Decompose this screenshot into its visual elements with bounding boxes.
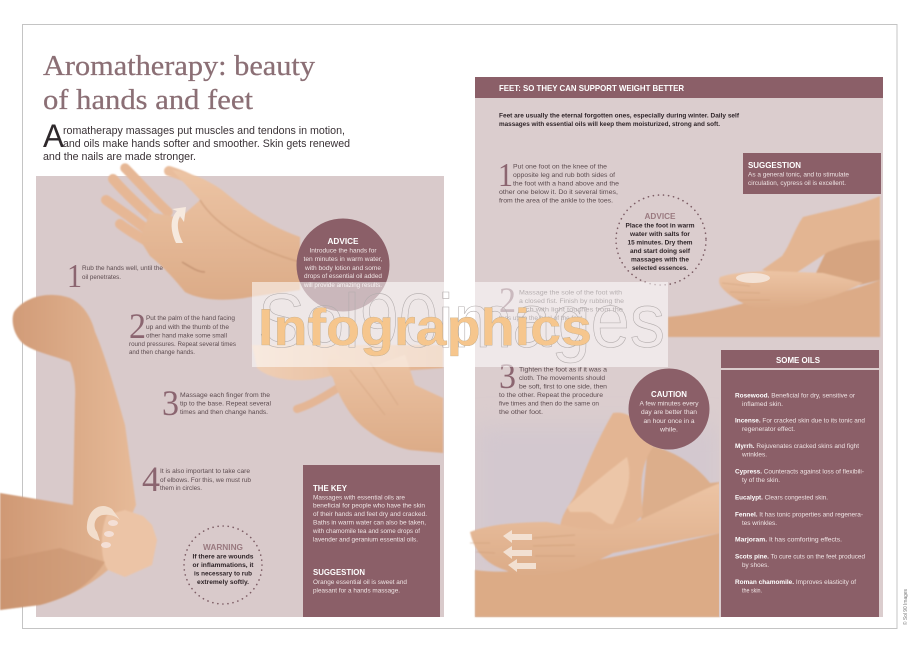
callout: advice circle: ten minutes in warm water, — [304, 256, 383, 263]
panel: the key and suggestion: Massages with essential oils are — [313, 494, 405, 502]
callout: foot advice: 15 minutes. Dry them — [628, 240, 693, 246]
callout: advice circle: ADVICE — [328, 236, 359, 246]
callout: foot advice: water with salts for — [629, 231, 690, 238]
panel: the key and suggestion: THE KEY — [313, 483, 347, 493]
photo: leg and foot massage — [470, 413, 720, 617]
foot step 3: cloth. The movements should — [519, 375, 605, 382]
panel: some oils list: Scots pine. To cure cuts on the feet produced — [735, 554, 865, 560]
icon: curved arrow — [172, 207, 186, 243]
suggestion box — [743, 153, 881, 194]
callout: advice circle — [296, 218, 390, 312]
callout: foot advice: Place the foot in warm — [626, 222, 695, 230]
callout: advice circle: Introduce the hands for — [310, 248, 377, 254]
panel: some oils list: regenerator effect. — [742, 426, 795, 433]
icon: foot highlight — [736, 273, 770, 283]
foot step 1 — [498, 157, 619, 204]
callout: warning — [184, 526, 262, 604]
callout: caution: an hour once in a — [644, 418, 695, 425]
callout: advice circle: with body lotion and some — [304, 265, 381, 272]
step 4: them in circles. — [160, 485, 202, 492]
callout: caution: CAUTION — [651, 389, 687, 399]
panel: some oils list: the skin. — [742, 588, 762, 594]
foot step 2: 2 — [499, 280, 516, 320]
watermark: Sol90images — [258, 279, 665, 364]
intro text — [43, 118, 350, 163]
icon: elbow circular arrow — [87, 506, 120, 541]
panel: the key and suggestion: beneficial for people who have the skin — [313, 502, 425, 510]
panel: the key and suggestion: lavender and geranium essential oils. — [313, 536, 418, 544]
panel: the key and suggestion: Orange essential oil is sweet and — [313, 579, 407, 586]
panel: the key and suggestion: of their hands and feet dry and cracked. — [313, 511, 427, 518]
foot step 2: arch with light touches from the — [519, 306, 623, 314]
title: Aromatherapy: beauty — [43, 50, 316, 82]
step 4: It is also important to take care — [160, 468, 250, 475]
step 1 — [67, 258, 163, 295]
title: of hands and feet — [43, 84, 253, 116]
callout: advice circle: will provide amazing results. — [303, 282, 382, 289]
photo: hands on fingers — [252, 345, 443, 453]
foot step 3: to the other. Repeat the procedure — [499, 392, 603, 399]
icon: white arrows on foot — [503, 530, 536, 572]
callout: warning: WARNING — [203, 543, 243, 552]
callout: advice circle: drops of essential oil added — [304, 273, 382, 280]
suggestion box: circulation, cypress oil is excellent. — [748, 180, 846, 187]
credit: © Sol 90 Images — [902, 589, 909, 625]
foot step 2: a closed fist. Finish by rubbing the — [519, 298, 624, 305]
callout: warning: is necessary to rub — [194, 570, 252, 578]
panel: some oils list: Rosewood. Beneficial for dry, sensitive or — [735, 392, 856, 400]
panel: some oils list: inflamed skin. — [742, 401, 783, 408]
feet header bar — [475, 77, 883, 98]
foot step 1: other one below it. Do it several times, — [499, 189, 618, 196]
foot step 1: opposite leg and rub both sides of — [513, 172, 615, 179]
panel: some oils list: Marjoram. It has comforting effects. — [735, 536, 842, 544]
photo: foot on knee — [668, 196, 880, 337]
callout: caution: day are better than — [641, 409, 697, 416]
panel: the key and suggestion: SUGGESTION — [313, 567, 365, 577]
step 4 — [142, 459, 251, 499]
panel: some oils header: SOME OILS — [776, 355, 820, 365]
foot step 3: the other foot. — [499, 409, 543, 416]
panel: the key and suggestion: with chamomile tea and some drops of — [312, 528, 420, 535]
panel: some oils list: wrinkles. — [741, 452, 767, 458]
foot step 2: Massage the sole of the foot with — [519, 290, 622, 296]
step 1: oil penetrates. — [82, 274, 121, 281]
panel: the key and suggestion — [303, 465, 440, 617]
nails — [101, 520, 118, 548]
panel: some oils list: tes wrinkles. — [742, 520, 777, 527]
step 3 — [162, 383, 272, 423]
panel: some oils list: Myrrh. Rejuvenates cracked skins and fight — [735, 443, 859, 450]
foot step 2: toes up to the heel of the foot. — [499, 315, 584, 322]
intro text: A — [43, 118, 65, 154]
panel: hands — [36, 176, 444, 617]
feet intro: massages with essential oils will keep them moisturized, strong and soft. — [499, 121, 720, 128]
step 2: Put the palm of the hand facing — [146, 315, 235, 322]
callout: caution — [628, 368, 710, 450]
step 3: tip to the base. Repeat several — [180, 400, 272, 408]
panel: some oils list: Roman chamomile. Improves elasticity of — [735, 579, 856, 586]
step 1: Rub the hands well, until the — [82, 265, 163, 272]
callout: foot advice: selected essences. — [632, 265, 688, 272]
suggestion box: SUGGESTION — [748, 160, 801, 170]
panel: the key and suggestion: Baths in warm water can also be taken, — [313, 520, 426, 526]
step 4: of elbows. For this, we must rub — [160, 477, 251, 484]
panel: some oils list: ty of the skin. — [742, 477, 780, 484]
step 2: up and with the thumb of the — [146, 324, 229, 331]
callout: caution: while. — [659, 426, 678, 434]
step 2: other hand make some small — [146, 332, 228, 340]
callout: caution: A few minutes every — [640, 400, 699, 408]
intro text: and the nails are made stronger. — [43, 151, 196, 163]
step 2: and then change hands. — [129, 349, 195, 356]
intro text: and oils make hands softer and smoother. Skin gets renewed — [63, 138, 350, 150]
panel: some oils list: by shoes. — [742, 562, 769, 569]
callout: foot advice: and start doing self — [630, 248, 691, 255]
title — [43, 50, 316, 116]
callout: foot advice: ADVICE — [644, 212, 676, 221]
foot step 3: five times and then do the same on — [499, 400, 599, 408]
foot step 3: Tighten the foot as if it was a — [519, 366, 607, 374]
foot step 3: 3 — [499, 356, 516, 396]
foot step 1: the foot with a hand above and the — [513, 180, 619, 188]
foot step 1: from the area of the ankle to the toes. — [499, 198, 613, 204]
suggestion box: As a general tonic, and to stimulate — [748, 172, 849, 178]
panel: some oils header — [721, 350, 879, 368]
foot step 2 — [499, 280, 624, 322]
feet intro — [499, 112, 740, 128]
foot step 3: be soft, first to one side, then — [519, 384, 607, 390]
step 3: Massage each finger from the — [180, 392, 270, 399]
panel: feet — [475, 77, 883, 617]
callout: foot advice: massages with the — [631, 256, 689, 264]
panel: some oils list: Incense. For cracked skin due to its tonic and — [735, 418, 865, 424]
panel: some oils list: Eucalypt. Clears congested skin. — [735, 494, 828, 502]
step 2: 2 — [129, 306, 146, 346]
step 3: 3 — [162, 383, 179, 423]
callout: foot advice — [616, 195, 706, 285]
step 2: round pressures. Repeat several times — [129, 341, 237, 348]
feet intro: Feet are usually the eternal forgotten ones, especially during winter. Daily self — [499, 112, 740, 120]
foot step 3 — [499, 356, 607, 416]
step 3: times and then change hands. — [180, 409, 268, 416]
panel: some oils list: Cypress. Counteracts against loss of flexibili- — [735, 468, 864, 476]
foot step 1: Put one foot on the knee of the — [513, 164, 607, 170]
callout: warning: extremely softly. — [197, 579, 249, 586]
callout: warning: or inflammations, it — [192, 562, 254, 569]
step 2 — [129, 306, 237, 356]
step 1: 1 — [67, 258, 82, 295]
panel: the key and suggestion: pleasant for a hands massage. — [313, 588, 400, 594]
panel: some oils list — [719, 368, 883, 617]
intro text: romatherapy massages put muscles and tendons in motion, — [63, 125, 345, 137]
feet header bar: FEET: SO THEY CAN SUPPORT WEIGHT BETTER — [499, 83, 684, 93]
callout: warning: If there are wounds — [192, 554, 254, 560]
photo: arm and elbow — [0, 295, 157, 610]
panel: some oils list: Fennel. It has tonic properties and regenera- — [735, 512, 863, 518]
step 4: 4 — [142, 459, 160, 499]
foot step 1: 1 — [498, 157, 513, 194]
watermark: Infographics — [258, 299, 592, 357]
photo: massaging hands — [106, 168, 300, 300]
